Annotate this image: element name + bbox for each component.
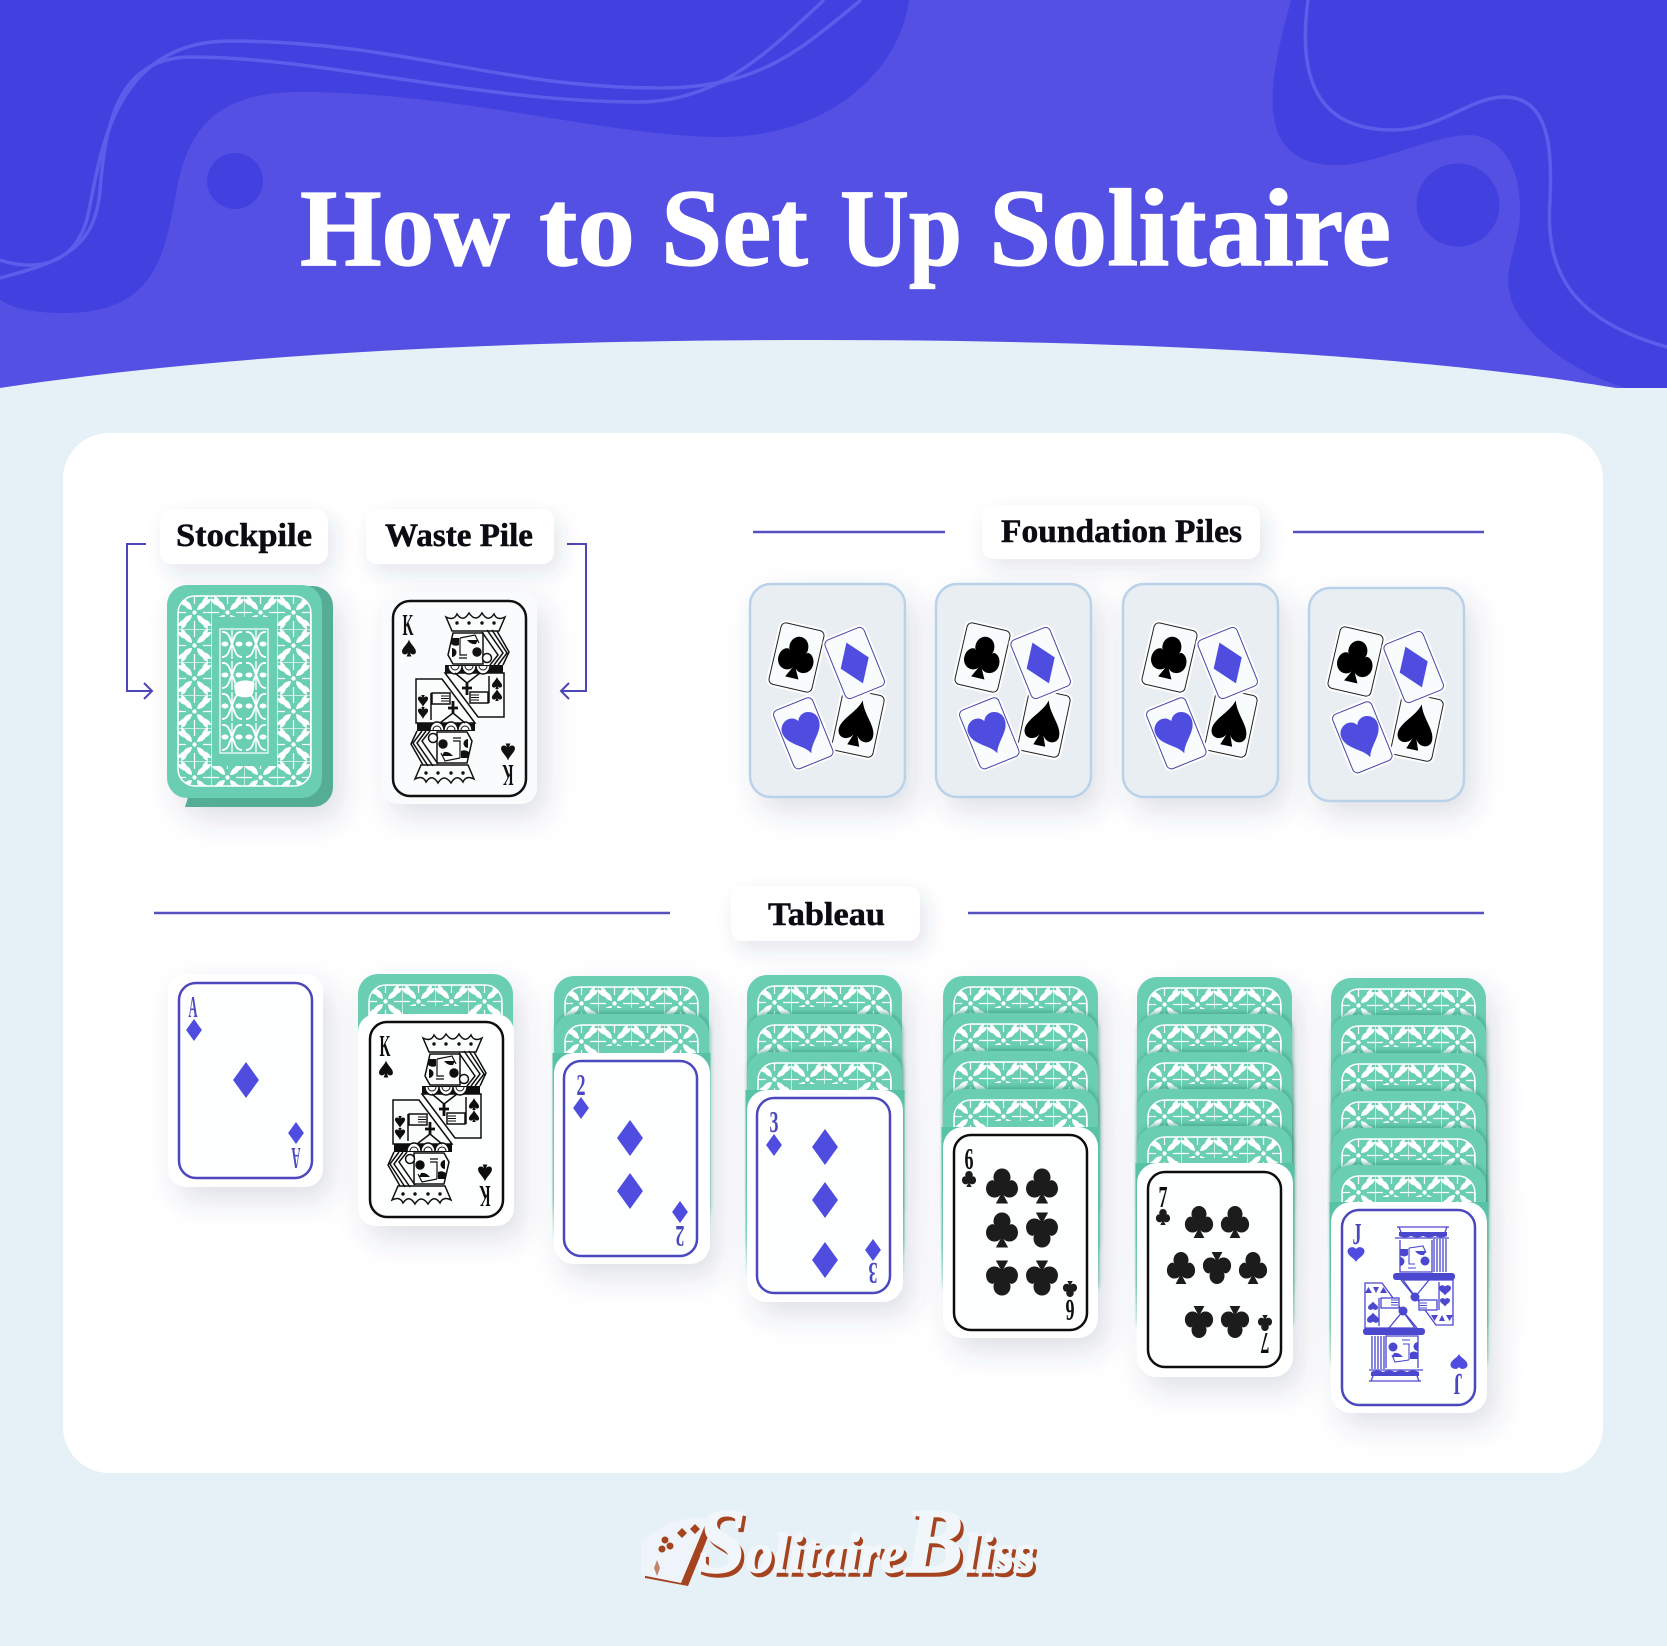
title [300, 167, 1391, 289]
tableau column 6: five backs and seven of clubs: 7 [1260, 1326, 1270, 1361]
tableau column 6: five backs and seven of clubs: 7 [1158, 1179, 1168, 1214]
decorative circle right [1416, 164, 1500, 246]
title: Set [661, 167, 808, 289]
foundation pile 4 [1309, 588, 1464, 801]
label: Stockpile [160, 509, 328, 564]
tableau column 2: one back and king of spades: K [480, 1179, 490, 1214]
logo wordmark shadow: SolitaireBliss [700, 1494, 1038, 1596]
arrow: stockpile loop [127, 544, 152, 699]
tableau column 3: two backs and two of diamonds [552, 976, 710, 1264]
foundation pile 3 [1123, 584, 1278, 797]
label: Waste Pile: Waste Pile [385, 518, 533, 554]
title: to [539, 167, 635, 289]
tableau column 6: five backs and seven of clubs [1136, 977, 1294, 1377]
logo icon: fan of cards [641, 1517, 716, 1586]
tableau column 1: ace of diamonds: A [188, 989, 198, 1024]
tableau column 4: three backs and three of diamonds: 3 [770, 1104, 778, 1139]
title: How [300, 167, 510, 289]
tableau column 4: three backs and three of diamonds [746, 975, 904, 1302]
tableau column 1: ace of diamonds [168, 974, 323, 1187]
tableau column 2: one back and king of spades: K [380, 1028, 390, 1063]
label: Stockpile: Stockpile [176, 518, 312, 554]
foundation pile 1 [750, 584, 905, 797]
header banner [0, 0, 1667, 388]
tableau column 5: four backs and six of clubs [942, 976, 1100, 1338]
title: Up [840, 167, 962, 289]
waste pile card: king of spades: K [402, 607, 414, 642]
tableau column 4: three backs and three of diamonds: 3 [868, 1256, 878, 1291]
waste pile card: king of spades [382, 592, 537, 804]
tableau column 3: two backs and two of diamonds: 2 [576, 1067, 586, 1102]
waste pile card: king of spades: K [502, 758, 514, 793]
logo: Solitaire Bliss [641, 1490, 1038, 1596]
tableau heading [154, 886, 1484, 941]
tableau column 3: two backs and two of diamonds: 2 [676, 1219, 684, 1254]
logo wordmark: SolitaireBliss [697, 1490, 1035, 1592]
tableau column 7: six backs and jack of hearts [1330, 978, 1488, 1413]
label: Waste Pile [366, 509, 554, 564]
tableau column 1: ace of diamonds: A [291, 1141, 300, 1176]
decorative blob: top right [1273, 0, 1667, 388]
title: Solitaire [989, 167, 1391, 289]
arrow: waste pile loop [561, 544, 586, 699]
stockpile deck [167, 585, 333, 807]
tableau column 7: six backs and jack of hearts: J [1352, 1216, 1362, 1251]
tableau column 7: six backs and jack of hearts: J [1454, 1367, 1462, 1402]
decorative blob: top left [0, 0, 909, 313]
tableau column 2: one back and king of spades [358, 974, 514, 1226]
decorative wavy lines [0, 0, 1667, 347]
main white panel [63, 433, 1603, 1473]
tableau column 5: four backs and six of clubs: 6 [964, 1141, 974, 1176]
foundation heading: Foundation Piles [1001, 514, 1242, 550]
decorative circle left [207, 153, 263, 209]
tableau heading: Tableau [768, 897, 885, 933]
foundation pile 2 [936, 584, 1091, 797]
tableau column 5: four backs and six of clubs: 6 [1066, 1293, 1074, 1328]
foundation heading [753, 505, 1484, 559]
